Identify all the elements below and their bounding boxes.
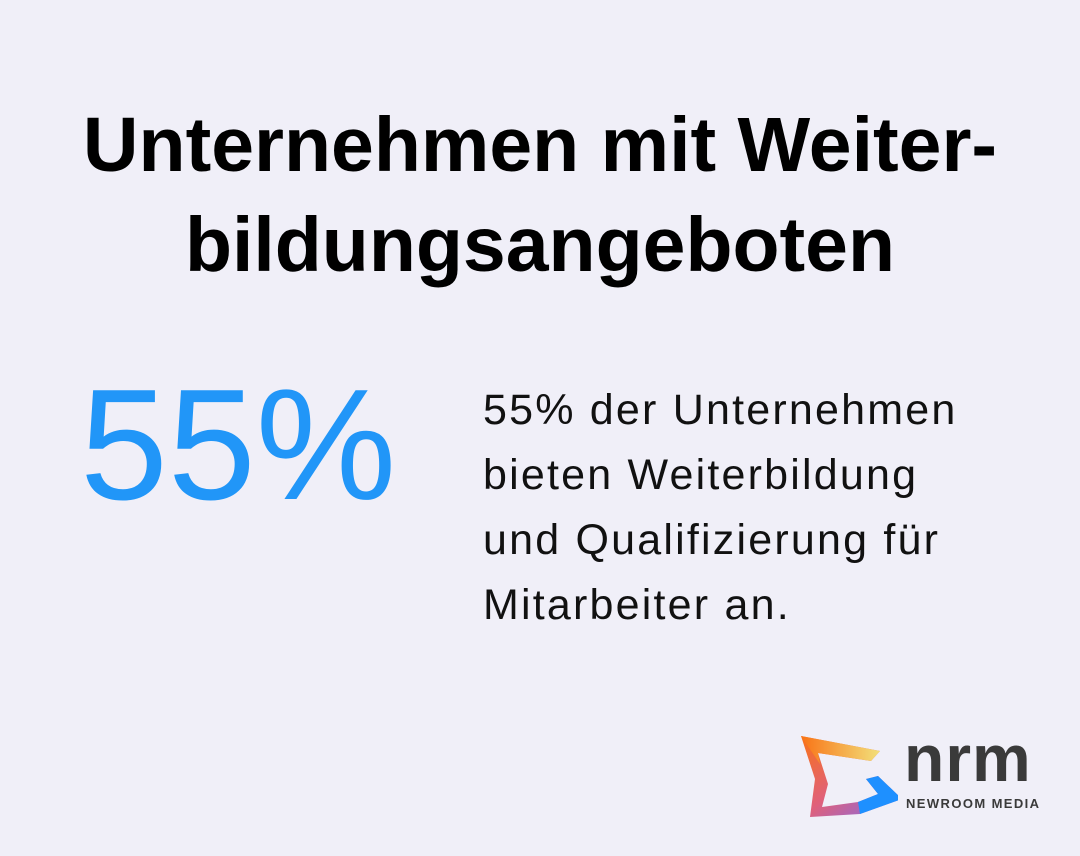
description text: 55% der Unternehmen xyxy=(483,386,957,434)
logo: NEWROOM MEDIA xyxy=(906,796,1040,811)
icon: logo mark xyxy=(801,736,898,817)
description text: Mitarbeiter an. xyxy=(483,581,791,629)
title: bildungsangeboten xyxy=(185,202,895,288)
big stat: 55% xyxy=(80,357,396,533)
title xyxy=(83,102,997,288)
description text: und Qualifizierung für xyxy=(483,516,940,564)
description text xyxy=(483,386,957,629)
logo xyxy=(801,721,1040,817)
logo text: nrm xyxy=(904,721,1032,795)
description text: bieten Weiterbildung xyxy=(483,451,918,499)
title: Unternehmen mit Weiter- xyxy=(83,102,997,188)
